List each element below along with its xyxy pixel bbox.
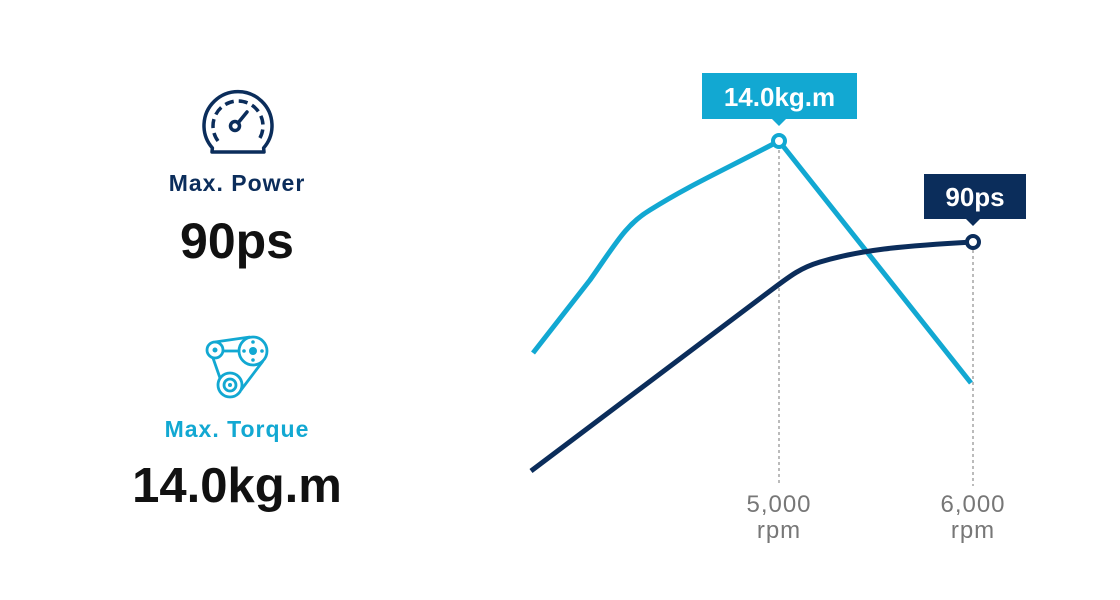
value: 14.0kg.m: 14.0kg.m — [132, 459, 342, 513]
power line — [531, 236, 979, 471]
callout: torque: 14.0kg.m — [724, 82, 835, 112]
icon: belt pulleys — [206, 336, 268, 398]
label: max power: Max. Power — [169, 170, 305, 196]
torque line — [533, 135, 971, 383]
axis labels: rpm — [757, 517, 801, 544]
callout: power — [924, 174, 1026, 226]
axis labels: rpm — [951, 517, 995, 544]
axis labels: 5,000 — [746, 491, 812, 518]
icon: speedometer — [202, 90, 274, 154]
axis labels: 6,000 — [940, 491, 1006, 518]
value: 90ps: 90ps — [180, 213, 294, 269]
callout: torque — [702, 73, 857, 126]
axis labels — [746, 491, 1006, 544]
label: max torque: Max. Torque — [165, 416, 309, 442]
callout: power: 90ps — [945, 182, 1005, 212]
